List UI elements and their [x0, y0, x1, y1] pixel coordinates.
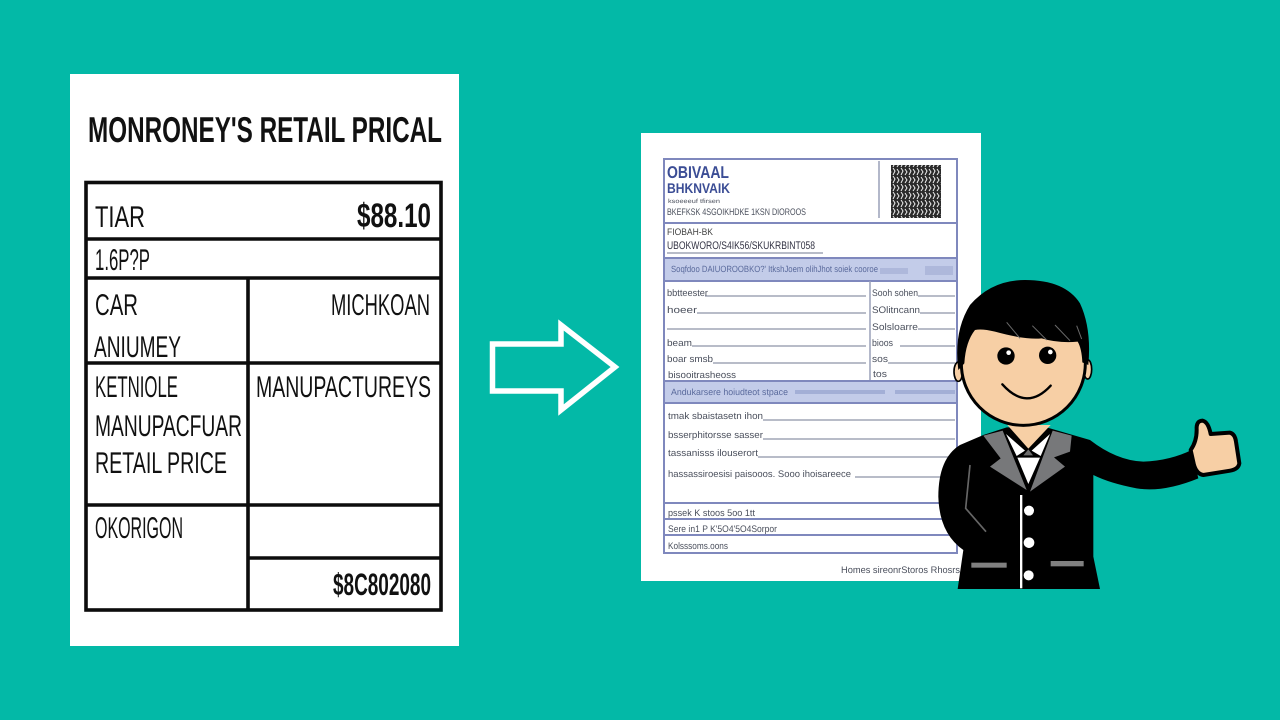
- shirt, neck and bow tie: [1004, 425, 1052, 488]
- form text: bisooitrasheoss: [668, 370, 736, 381]
- form heading: BHKNVAIK: [667, 180, 730, 196]
- table text: sticker values: $88.10: [357, 197, 431, 235]
- form text: bsserphitorsse sasser: [668, 430, 763, 441]
- form text: tos: [873, 369, 887, 380]
- table text: sticker values: $8C802080: [333, 567, 431, 602]
- form header bands: [664, 258, 957, 403]
- QR code: [891, 165, 941, 218]
- table text: sticker values: MANUPACTUREYS: [256, 371, 431, 404]
- table text: sticker values: MICHKOAN: [331, 289, 430, 322]
- form text: Soqfdoo DAIUOROOBKO?' ItkshJoem olihJhot soiek cooroe: [671, 264, 878, 274]
- table text: sticker values: ANIUMEY: [94, 331, 181, 364]
- panel: official form document: [641, 133, 981, 581]
- table text: sticker values: CAR: [95, 289, 138, 322]
- form text: Solsloarre: [872, 322, 918, 333]
- form text: hassassiroesisi paisooos. Sooo ihoisareece: [668, 469, 851, 480]
- table text: sticker values: TIAR: [95, 201, 145, 234]
- form frame: [664, 159, 957, 553]
- body: black jacket and arm: [938, 427, 1198, 589]
- form text: bioos: [872, 338, 893, 349]
- jacket details: [966, 465, 1084, 588]
- form text: tmak sbaistasetn ihon: [668, 411, 763, 422]
- form text: beam: [667, 338, 692, 349]
- form text: pssek K stoos 5oo 1tt: [668, 508, 755, 519]
- form text: bbtteester: [667, 288, 708, 299]
- form text: hoeer: [667, 305, 697, 316]
- form text: UBOKWORO/S4IK56/SKUKRBINT058: [667, 240, 815, 252]
- table text: sticker values: OKORIGON: [95, 512, 183, 545]
- form text: Kolsssoms.oons: [668, 541, 728, 552]
- table text: sticker values: MANUPACFUAR: [95, 410, 242, 443]
- table: sticker grid: [86, 182, 441, 610]
- table text: sticker values: [94, 197, 431, 602]
- icon: smiling man in suit giving thumbs up: [938, 280, 1239, 589]
- heading: sticker title: MONRONEY'S RETAIL PRICAL: [88, 109, 442, 150]
- hand: thumbs up: [1191, 421, 1239, 475]
- form text: boar smsb: [667, 354, 713, 365]
- form text: tassanisss ilouserort: [668, 448, 758, 459]
- form text: [667, 198, 960, 576]
- table text: sticker values: 1.6P?P: [95, 244, 150, 277]
- form text: ksoeeeuf tfirsen: [668, 198, 720, 205]
- form text: BKEFKSK 4SGOIKHDKE 1KSN DIOROOS: [667, 207, 806, 218]
- table text: sticker values: RETAIL PRICE: [95, 447, 227, 480]
- form text: Homes sireonrStoros Rhosrs: [841, 565, 960, 576]
- lapels: [983, 431, 1072, 492]
- head: [954, 280, 1092, 425]
- form text: Andukarsere hoiudteot stpace: [671, 387, 788, 397]
- panel: Monroney retail price sticker: [70, 74, 459, 646]
- form text: SOlitncann: [872, 305, 920, 316]
- arrow: sticker to form: [492, 325, 615, 410]
- form text: Sooh sohen: [872, 288, 918, 299]
- form text: FIOBAH-BK: [667, 227, 714, 238]
- form text: sos: [872, 354, 888, 365]
- form entry lines: [667, 253, 955, 477]
- form heading: [667, 163, 730, 196]
- form heading: OBIVAAL: [667, 163, 729, 182]
- form text: Sere in1 P K'5O4'5O4Sorpor: [668, 524, 777, 535]
- hair: [957, 280, 1089, 370]
- table text: sticker values: KETNIOLE: [95, 371, 178, 404]
